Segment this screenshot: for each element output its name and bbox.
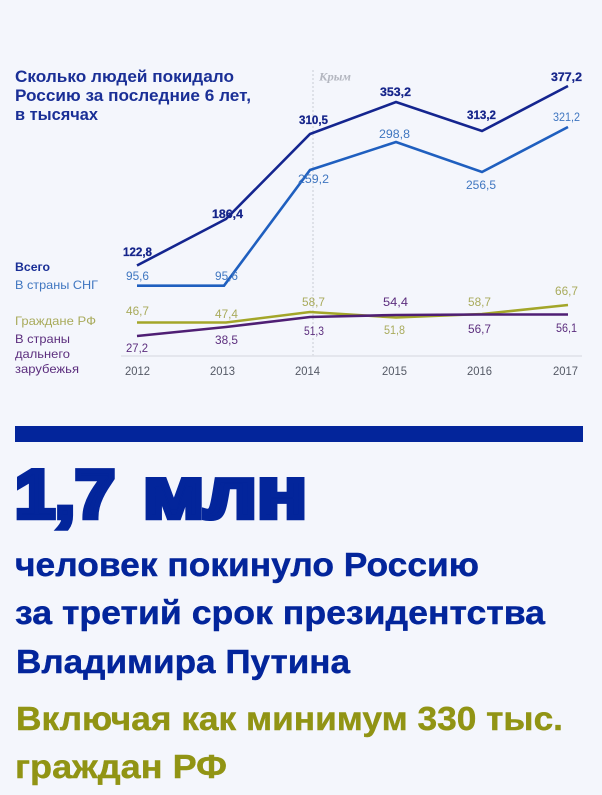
citizens statement xyxy=(15,700,563,785)
value labels: far abroad: 54,4 xyxy=(383,295,408,309)
value labels: citizens of Russia: 47,4 xyxy=(215,307,238,321)
legend: Граждане РФ xyxy=(15,314,96,328)
chart title xyxy=(15,68,251,124)
divider bar xyxy=(15,426,583,442)
value labels: citizens of Russia: 51,8 xyxy=(384,323,405,337)
value labels: total: 186,4 xyxy=(212,207,243,221)
line: CIS countries xyxy=(137,127,568,286)
legend: зарубежья xyxy=(15,362,79,376)
value labels: total: 310,5 xyxy=(299,113,328,127)
value labels: far abroad: 27,2 xyxy=(126,341,148,355)
x axis with years: 2017 xyxy=(553,364,578,378)
value labels: CIS countries: 256,5 xyxy=(466,178,496,192)
value labels: far abroad: 51,3 xyxy=(304,324,324,338)
main statement: за третий срок президентства xyxy=(15,594,546,631)
legend xyxy=(15,260,99,376)
x axis with years: 2014 xyxy=(295,364,320,378)
legend: Всего xyxy=(15,260,50,274)
citizens statement: Включая как минимум 330 тыс. xyxy=(16,700,563,737)
x axis with years: 2012 xyxy=(125,364,150,378)
value labels: total xyxy=(123,70,582,259)
legend: дальнего xyxy=(15,347,70,361)
value labels: citizens of Russia xyxy=(126,284,578,337)
big number: 1,7 xyxy=(15,456,115,532)
line: total xyxy=(137,86,568,266)
value labels: total: 353,2 xyxy=(380,85,411,99)
value labels: total: 313,2 xyxy=(467,108,496,122)
legend: В страны xyxy=(15,332,70,346)
x axis with years: 2015 xyxy=(382,364,407,378)
chart title: Сколько людей покидало xyxy=(15,68,234,86)
value labels: citizens of Russia: 66,7 xyxy=(555,284,578,298)
value labels: CIS countries: 321,2 xyxy=(553,110,580,124)
value labels: far abroad: 56,7 xyxy=(468,322,491,336)
value labels: citizens of Russia: 58,7 xyxy=(302,295,325,309)
legend: В страны СНГ xyxy=(15,278,99,292)
value labels: far abroad: 56,1 xyxy=(556,321,577,335)
chart title: в тысячах xyxy=(15,106,99,124)
value labels: citizens of Russia: 58,7 xyxy=(468,295,491,309)
x axis with years: 2016 xyxy=(467,364,492,378)
value labels: citizens of Russia: 46,7 xyxy=(126,304,149,318)
main statement xyxy=(15,546,546,680)
value labels: CIS countries: 298,8 xyxy=(379,127,410,141)
big number: млн xyxy=(143,454,307,534)
value labels: CIS countries xyxy=(126,110,580,283)
value labels: CIS countries: 95,6 xyxy=(126,269,149,283)
value labels: far abroad: 38,5 xyxy=(215,333,238,347)
line: far abroad xyxy=(137,314,568,336)
big number xyxy=(15,454,307,534)
value labels: CIS countries: 95,6 xyxy=(215,269,238,283)
value labels: total: 377,2 xyxy=(551,70,582,84)
value labels: CIS countries: 259,2 xyxy=(298,172,329,186)
value labels: far abroad xyxy=(126,295,577,355)
main statement: человек покинуло Россию xyxy=(15,546,479,583)
annotation: Crimea marker: Крым xyxy=(318,70,351,84)
x axis with years: 2013 xyxy=(210,364,235,378)
chart title: Россию за последние 6 лет, xyxy=(15,87,251,105)
main statement: Владимира Путина xyxy=(16,643,351,680)
citizens statement: граждан РФ xyxy=(15,748,227,785)
line: citizens of Russia xyxy=(137,305,568,322)
x axis with years xyxy=(121,356,582,378)
value labels: total: 122,8 xyxy=(123,245,152,259)
